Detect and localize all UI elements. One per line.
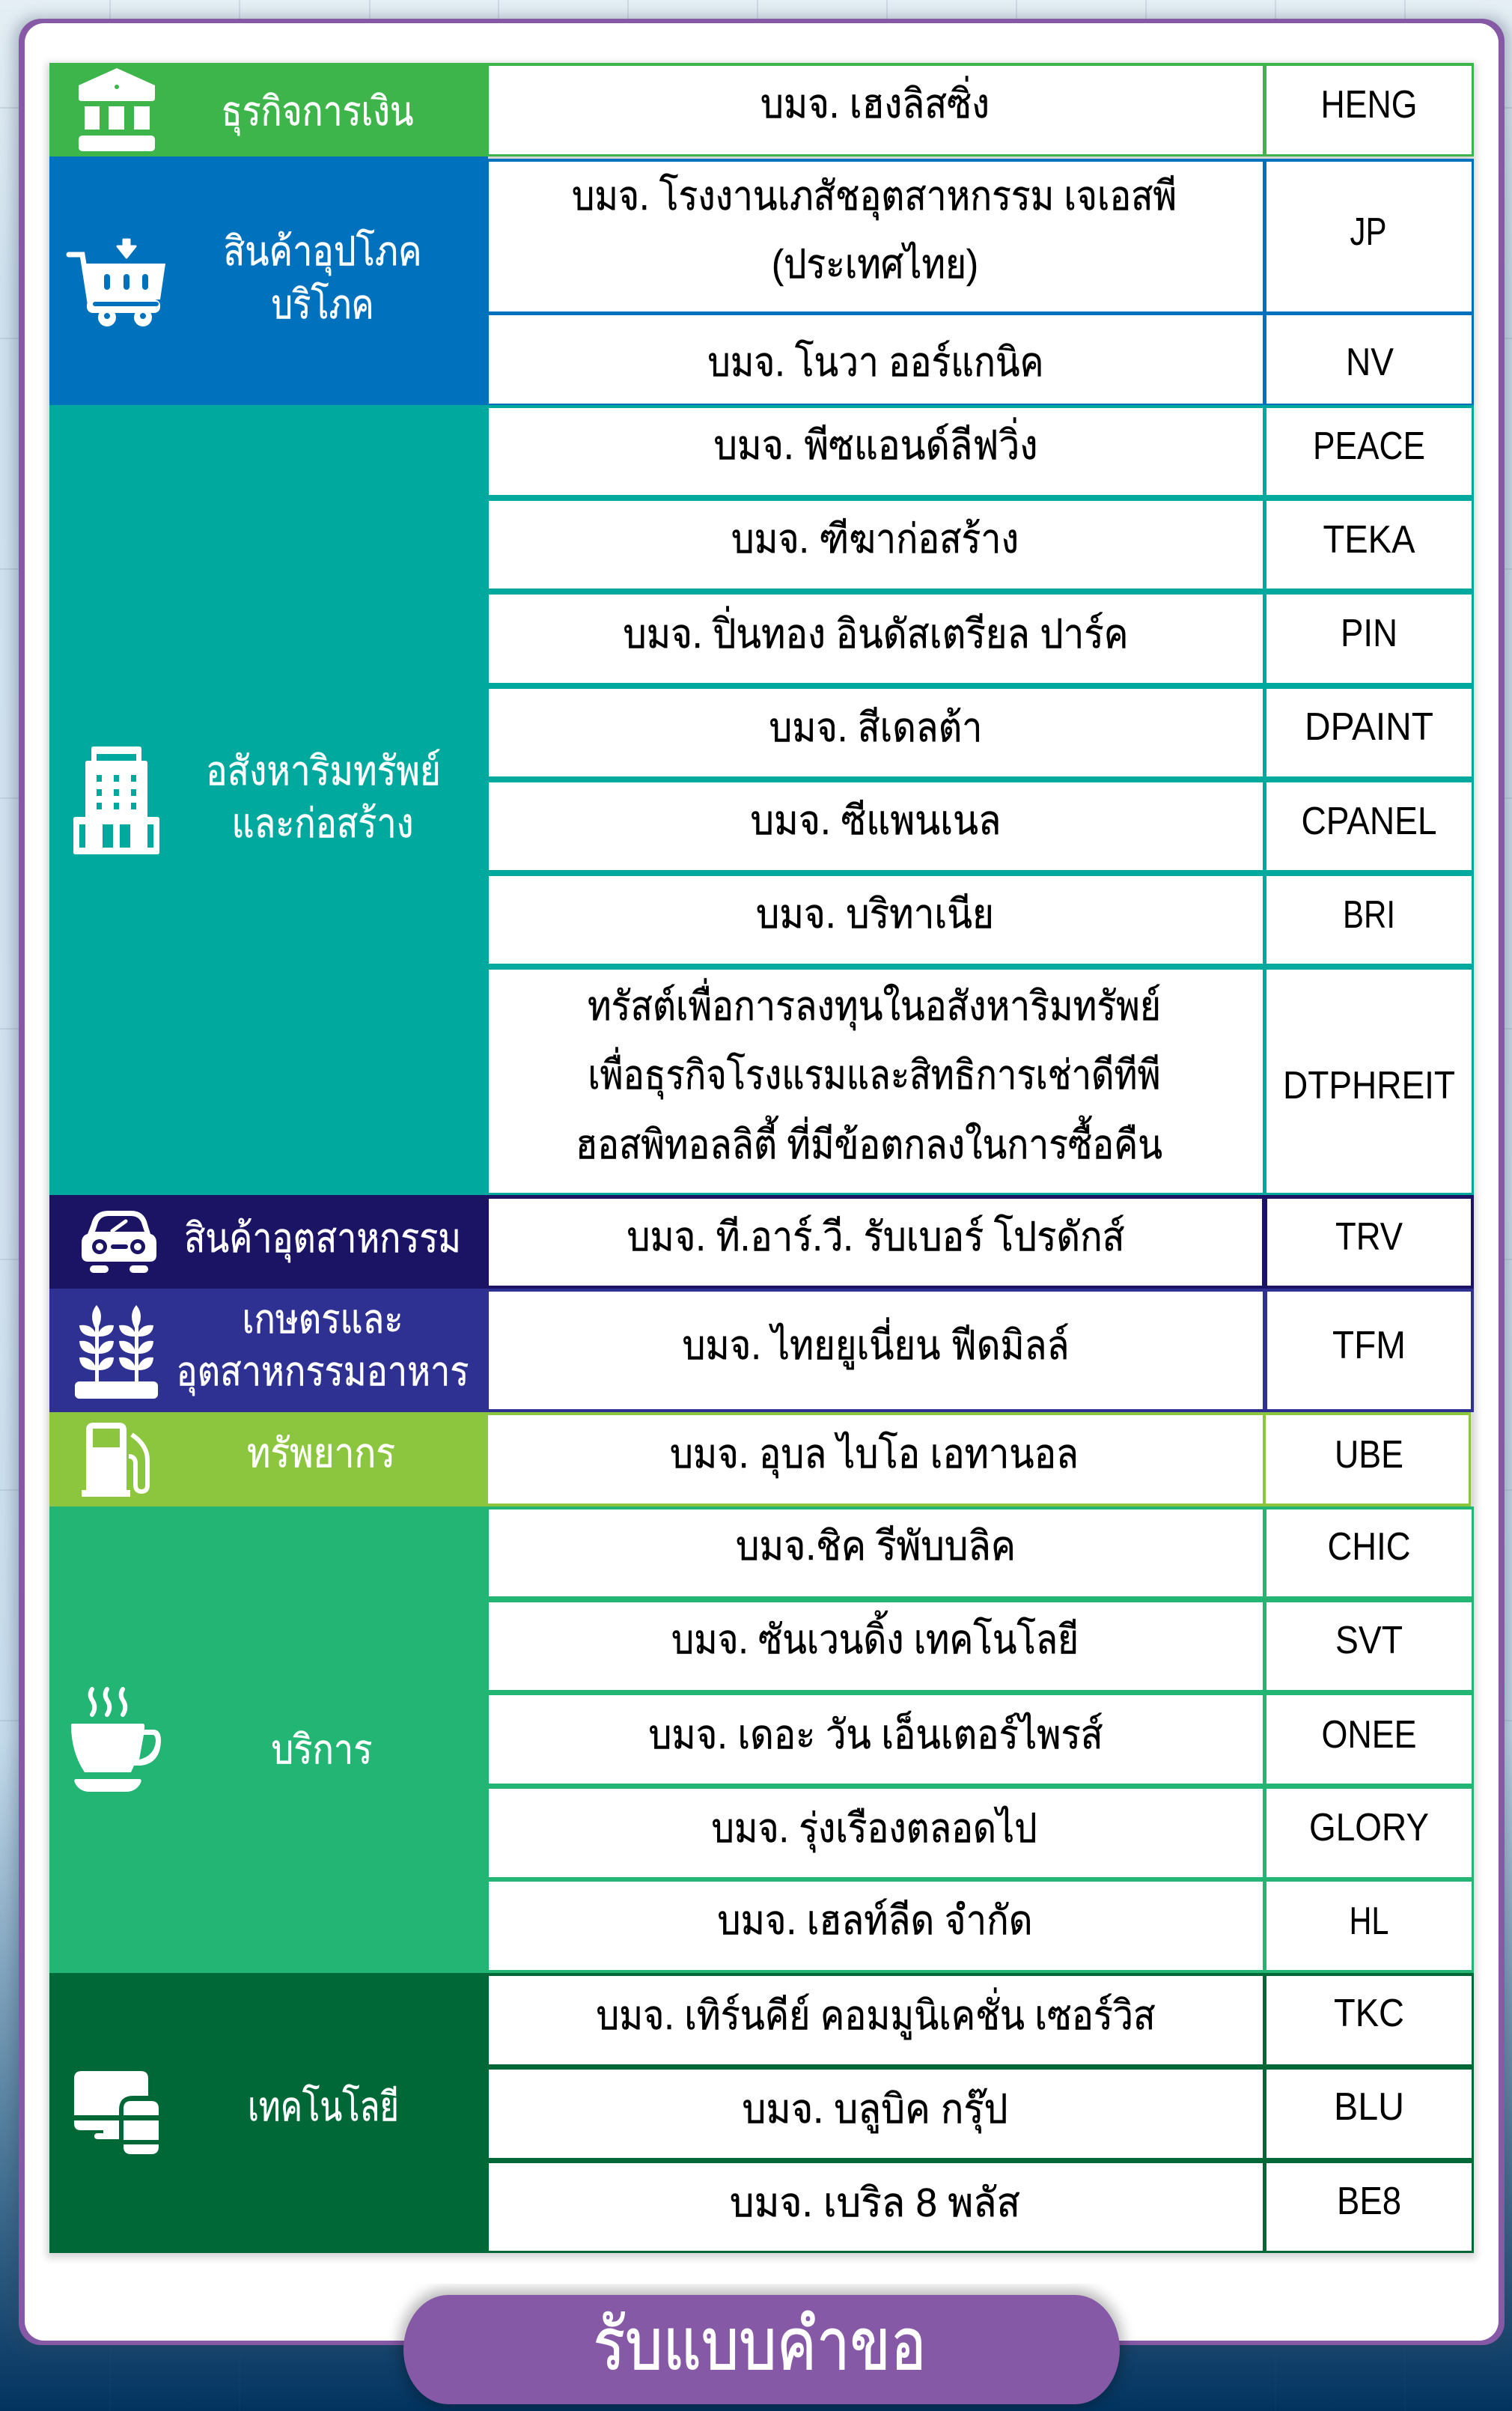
button: request form: รับแบบคำขอ (593, 2305, 927, 2385)
row: PEACE: PEACE (1313, 425, 1425, 468)
row: GLORY (489, 1789, 1472, 1877)
label: agro and food industry (177, 1297, 469, 1396)
row: TKC: TKC (1334, 1992, 1404, 2035)
row: JP: บมจ. โรงงานเภสัชอุตสาหกรรม เจเอสพี (572, 173, 1177, 221)
row: PEACE (489, 408, 1472, 495)
category: property and construction (49, 405, 1474, 1195)
row: PIN: บมจ. ปิ่นทอง อินดัสเตรียล ปาร์ค (623, 606, 1129, 657)
row: DTPHREIT (489, 970, 1472, 1193)
row: BLU (489, 2070, 1472, 2158)
row: BE8: BE8 (1337, 2180, 1401, 2223)
row: NV: บมจ. โนวา ออร์แกนิค (708, 339, 1043, 385)
row: PEACE: บมจ. พีซแอนด์ลีฟวิ่ง (714, 417, 1037, 468)
row: TRV (489, 1199, 1471, 1286)
category: technology (49, 1973, 1474, 2253)
category: financial business (49, 63, 1474, 156)
row: TEKA: บมจ. ฑีฆาก่อสร้าง (731, 517, 1019, 562)
category: agro and food industry (49, 1289, 1474, 1412)
icon: fuel pump (82, 1423, 147, 1497)
label: industrials: สินค้าอุตสาหกรรม (184, 1216, 461, 1263)
row: HL (489, 1882, 1472, 1970)
row: TEKA: TEKA (1323, 518, 1415, 562)
row: TFM (489, 1292, 1471, 1409)
row: BE8: บมจ. เบริล 8 พลัส (730, 2180, 1020, 2225)
category: consumer products (49, 156, 1474, 405)
row: NV: NV (1346, 341, 1394, 384)
row: BLU: BLU (1334, 2085, 1404, 2129)
label: consumer products: สินค้าอุปโภค (223, 228, 422, 276)
row: JP (489, 162, 1472, 311)
row: CPANEL: CPANEL (1301, 800, 1437, 843)
label: financial business: ธุรกิจการเงิน (222, 89, 413, 136)
row: SVT: SVT (1335, 1619, 1403, 1662)
row: GLORY: GLORY (1309, 1806, 1429, 1849)
icon: plants (75, 1305, 158, 1399)
icon: building (73, 747, 159, 854)
row: TRV: TRV (1335, 1215, 1403, 1259)
label: services: บริการ (271, 1727, 373, 1772)
row: CHIC (489, 1509, 1472, 1596)
row: CHIC: บมจ.ชิค รีพับบลิค (736, 1524, 1016, 1569)
row: HENG: บมจ. เฮงลิสซิ่ง (760, 76, 990, 127)
row: UBE: UBE (1335, 1433, 1403, 1477)
label: consumer products (223, 228, 422, 327)
icon: car (82, 1211, 156, 1273)
row: UBE: บมจ. อุบล ไบโอ เอทานอล (670, 1431, 1079, 1479)
row: BE8 (489, 2163, 1472, 2251)
label: property and construction: อสังหาริมทรัพย์ (206, 749, 441, 794)
row: GLORY: บมจ. รุ่งเรืองตลอดไป (711, 1805, 1037, 1853)
row: CHIC: CHIC (1328, 1525, 1410, 1569)
label: agro and food industry: อุตสาหกรรมอาหาร (177, 1349, 469, 1396)
row: BRI: บมจ. บริทาเนีย (756, 892, 994, 937)
icon: shopping cart (69, 240, 165, 326)
row: TFM: TFM (1332, 1324, 1406, 1367)
row: SVT: บมจ. ซันเวนดิ้ง เทคโนโลยี (671, 1611, 1079, 1662)
icon: coffee cup (71, 1689, 161, 1792)
label: consumer products: บริโภค (271, 282, 374, 327)
row: TRV: บมจ. ที.อาร์.วี. รับเบอร์ โปรดักส์ (627, 1214, 1124, 1259)
row: CPANEL: บมจ. ซีแพนเนล (750, 798, 1002, 843)
row: ONEE (489, 1695, 1472, 1784)
row: DTPHREIT: ฮอสพิทอลลิตี้ ที่มีข้อตกลงในการซื้อคืน (576, 1116, 1162, 1167)
row: HL: บมจ. เฮลท์ลีด จำกัด (717, 1898, 1033, 1943)
row: BRI (489, 876, 1472, 964)
row: PIN: PIN (1341, 612, 1397, 655)
row: CPANEL (489, 782, 1472, 870)
label: technology: เทคโนโลยี (248, 2084, 399, 2129)
label: resources: ทรัพยากร (247, 1431, 395, 1476)
row: ONEE: บมจ. เดอะ วัน เอ็นเตอร์ไพรส์ (648, 1711, 1103, 1757)
row: DPAINT (489, 689, 1472, 776)
row: TEKA (489, 501, 1472, 589)
row: DTPHREIT: เพื่อธุรกิจโรงแรมและสิทธิการเช่าดีทีพี (588, 1047, 1160, 1100)
row: UBE (488, 1415, 1469, 1504)
label: agro and food industry: เกษตรและ (243, 1297, 403, 1342)
row: DPAINT: บมจ. สีเดลต้า (769, 705, 982, 750)
button: request form (399, 2290, 1124, 2407)
row: TKC (489, 1976, 1472, 2064)
label: property and construction: และก่อสร้าง (232, 801, 413, 846)
row: BRI: BRI (1343, 893, 1395, 937)
row: DPAINT: DPAINT (1305, 705, 1433, 749)
label: property and construction (206, 749, 441, 846)
icon: devices (74, 2071, 159, 2154)
row: HL: HL (1349, 1900, 1389, 1943)
row: NV (489, 315, 1472, 404)
row: HENG (489, 66, 1472, 154)
row: TKC: บมจ. เทิร์นคีย์ คอมมูนิเคชั่น เซอร์วิส (596, 1987, 1156, 2040)
row: TFM: บมจ. ไทยยูเนี่ยน ฟีดมิลล์ (683, 1317, 1069, 1369)
row: ONEE: ONEE (1322, 1713, 1416, 1757)
row: JP: JP (1350, 210, 1386, 254)
row: DTPHREIT: ทรัสต์เพื่อการลงทุนในอสังหาริมทรัพย์ (588, 978, 1161, 1031)
row: PIN (489, 595, 1472, 683)
row: BLU: บมจ. บลูบิค กรุ๊ป (743, 2087, 1008, 2134)
row: JP: (ประเทศไทย) (772, 241, 978, 287)
row: HENG: HENG (1320, 83, 1418, 127)
row: DTPHREIT: DTPHREIT (1283, 1064, 1455, 1107)
category: services (49, 1507, 1474, 1973)
icon: bank (79, 68, 155, 151)
category: resources (49, 1412, 1471, 1507)
row: SVT (489, 1602, 1472, 1690)
category: industrials (49, 1195, 1474, 1289)
